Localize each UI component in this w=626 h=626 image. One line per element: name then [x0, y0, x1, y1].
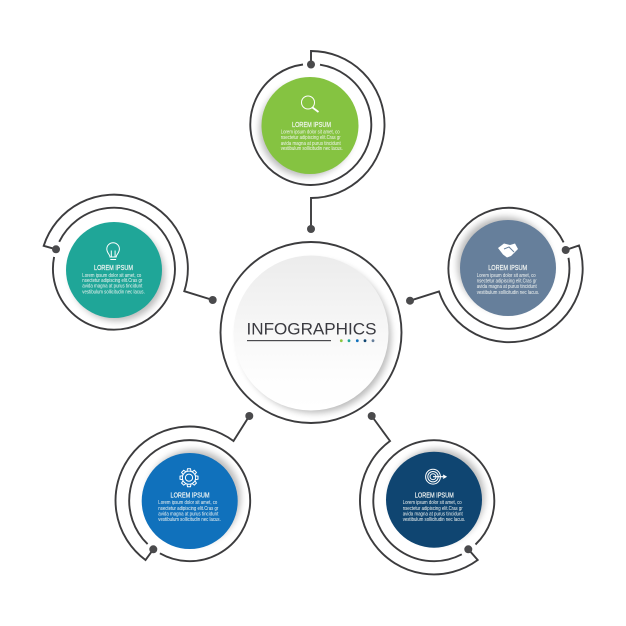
outer arc and connector	[116, 416, 249, 560]
node dot	[307, 60, 315, 68]
panel: navy target	[360, 412, 494, 574]
text: nsectetur adipiscing elit.Cras gr	[477, 278, 537, 284]
disc	[66, 222, 162, 318]
outer arc and connector	[360, 416, 478, 574]
text: Lorem ipsum dolor sit amet, co	[281, 130, 340, 136]
text	[158, 492, 221, 523]
text: avida magna at purus tincidunt	[477, 284, 537, 290]
text: vestibulum sollicitudin nec lacus.	[281, 146, 343, 152]
text: Lorem ipsum dolor sit amet, co	[477, 273, 536, 279]
panel: slate partnership	[406, 208, 583, 342]
inner ring	[129, 440, 250, 561]
text: nsectetur adipiscing elit.Cras gr	[158, 506, 219, 512]
text: avida magna at purus tincidunt	[281, 141, 341, 147]
text	[281, 122, 343, 152]
connector dot	[368, 412, 376, 420]
text: LOREM IPSUM	[415, 492, 454, 499]
text: vestibulum sollicitudin nec lacus.	[403, 517, 465, 523]
disc	[386, 452, 482, 548]
node dot	[149, 545, 157, 553]
text: vestibulum sollicitudin nec lacus.	[477, 290, 539, 296]
disc shadow	[260, 82, 354, 176]
hub disc	[234, 256, 388, 410]
text: nsectetur adipiscing elit.Cras gr	[403, 506, 463, 512]
title: INFOGRAPHICS	[246, 320, 376, 338]
colour dots	[340, 339, 374, 342]
panel: blue settings	[116, 412, 253, 561]
node dot	[562, 246, 570, 254]
hub ring	[220, 242, 402, 423]
text: Lorem ipsum dolor sit amet, co	[158, 500, 217, 506]
connector dot	[245, 412, 253, 420]
text: Lorem ipsum dolor sit amet, co	[82, 273, 141, 279]
disc shadow	[458, 217, 552, 311]
disc shadow	[390, 449, 484, 543]
text: avida magna at purus tincidunt	[82, 284, 143, 290]
text: LOREM IPSUM	[488, 265, 527, 272]
text: nsectetur adipiscing elit.Cras gr	[281, 135, 341, 141]
text: vestibulum sollicitudin nec lacus.	[82, 289, 145, 295]
inner ring	[373, 440, 494, 561]
panel: green search	[250, 51, 384, 233]
connector dot	[307, 225, 315, 233]
connector dot	[406, 297, 414, 305]
disc	[262, 77, 358, 174]
text: vestibulum sollicitudin nec lacus.	[158, 517, 221, 523]
text	[82, 265, 145, 295]
text	[477, 265, 539, 296]
inner ring	[53, 208, 175, 330]
outer arc and connector	[311, 51, 384, 229]
text	[403, 492, 465, 523]
hub disc shadow	[239, 261, 391, 413]
node dot	[464, 545, 472, 553]
icon: handshake	[498, 244, 518, 258]
disc	[142, 453, 238, 549]
inner ring	[448, 208, 569, 329]
node dot	[52, 245, 60, 253]
title underline	[247, 340, 331, 341]
text: avida magna at purus tincidunt	[158, 511, 219, 517]
inner ring	[250, 64, 371, 185]
icon: target	[426, 469, 446, 484]
outer arc and connector	[44, 195, 213, 300]
disc	[460, 220, 556, 316]
text: LOREM IPSUM	[94, 265, 133, 272]
outer arc and connector	[410, 246, 583, 342]
icon: gear	[180, 469, 198, 487]
text: avida magna at purus tincidunt	[403, 511, 463, 517]
connector dot	[209, 296, 217, 304]
text: LOREM IPSUM	[292, 122, 331, 129]
panel: central hub	[220, 242, 402, 423]
icon: light bulb	[107, 243, 119, 260]
disc shadow	[70, 227, 164, 321]
icon: magnifier	[302, 96, 318, 112]
text: Lorem ipsum dolor sit amet, co	[403, 500, 462, 506]
text: LOREM IPSUM	[170, 492, 210, 499]
text: nsectetur adipiscing elit.Cras gr	[82, 278, 143, 284]
panel: teal idea	[44, 195, 217, 330]
disc shadow	[146, 450, 240, 544]
